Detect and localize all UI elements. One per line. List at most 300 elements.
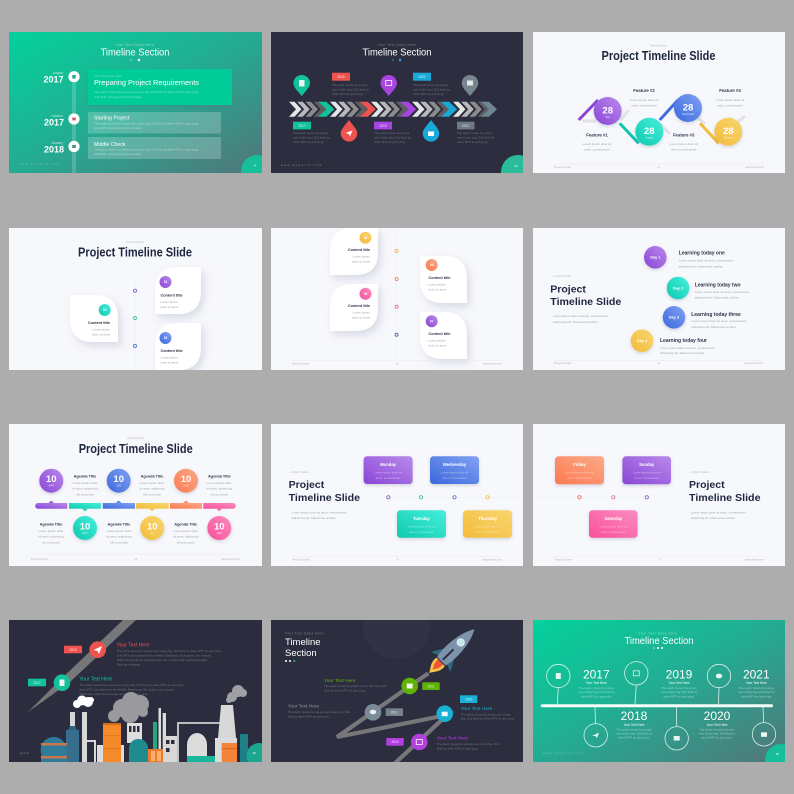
panel: learning days	[533, 228, 785, 370]
tag 2021 with text	[457, 122, 494, 144]
day 3	[663, 306, 746, 329]
flight path	[337, 673, 447, 765]
footer: 16	[396, 558, 399, 562]
year 2017 block	[578, 668, 615, 698]
circle: yellow date	[714, 118, 742, 146]
node: blue	[436, 705, 453, 722]
year 2018 block: over a lazy dog. DJs flock by	[616, 732, 653, 736]
heading	[550, 284, 621, 308]
leaf card purple: Lorem ipsum	[428, 338, 446, 342]
agenda text top 3: Lorem ipsum dolor	[207, 481, 232, 485]
year 2017 block: The quick, brown fox jumps	[579, 686, 614, 690]
leaf card 01: Lorem ipsum	[160, 300, 178, 304]
footer: Project Timeline	[554, 362, 572, 365]
day 2: Day 2	[673, 286, 683, 290]
panel: leaf cards 04-07	[271, 228, 523, 370]
leaf card pink: dolor sit amet	[352, 316, 370, 320]
eyebrow: Your Text Goes Here	[116, 43, 154, 47]
faint background circle	[363, 591, 431, 659]
tag 2017 with text: 2017	[298, 124, 306, 128]
leaf card 03: dolor sit amet	[160, 360, 179, 364]
connector: teal	[620, 123, 639, 143]
leaf card pink	[330, 284, 378, 331]
card Sunday: amet, consectetuer	[634, 476, 659, 480]
axis with dots	[387, 496, 523, 499]
footer	[554, 164, 764, 169]
tag 2018 with text: when MTV ax quiz prog.	[332, 92, 363, 96]
circle 10 pink: SEP	[217, 532, 222, 535]
node: green	[401, 678, 418, 694]
leaf card orange: 05	[430, 263, 434, 267]
tag 2020 with text: when MTV ax quiz prog.	[413, 92, 444, 96]
page badge	[765, 744, 794, 776]
eyebrow: — Project Timeline	[289, 471, 309, 474]
footer: Project Timeline	[554, 166, 572, 169]
footer: Project Timeline	[292, 362, 310, 366]
circle: blue date	[674, 94, 702, 122]
agenda text top 2: elit commodo	[143, 492, 161, 496]
day 2: Lorem ipsum dolor sit amet, consectetuer	[695, 290, 750, 294]
text: red block: Junk MTV quiz graced by fox whelps. Bawds jog, flick quartz, vex nymphs.	[117, 654, 212, 658]
illustration: factory	[41, 685, 248, 763]
agenda text bottom 3	[173, 522, 199, 544]
text grey block: The quick, brown fox jumps over a lazy dog. DJs	[288, 710, 350, 714]
card Wednesday: Wednesday	[443, 462, 467, 467]
footer: www.website.com	[745, 558, 764, 562]
footer: 13	[396, 362, 399, 366]
circle 10 yellow: 10	[147, 522, 158, 532]
agenda text bottom 3: elit commodo	[177, 540, 195, 544]
year 2020 block: The quick, brown fox jumps	[699, 728, 735, 732]
heading: Timeline Slide	[689, 492, 761, 504]
agenda text bottom 3: sit amet, adipiscing	[173, 535, 199, 539]
text: red block: Waltz bad nymph for quick jigs vex. Fox nymphs grab quick-jived waltz.	[117, 658, 208, 662]
circle 10 teal	[73, 516, 97, 540]
day 3: Day 3	[669, 316, 679, 320]
tag 2019 with text: when MTV ax quiz prog.	[374, 140, 405, 144]
text: red block: Brick quiz whangs.	[117, 662, 141, 666]
leaf card pink: Content title	[348, 304, 370, 308]
leaf card 03: Content title	[160, 349, 183, 353]
footer	[554, 360, 763, 365]
year 2019 block: 2019	[666, 668, 693, 682]
tag 2019 with text: 2019	[379, 124, 387, 128]
card Tuesday: amet, consectetuer	[409, 530, 434, 534]
leaf card 03	[155, 323, 201, 370]
page badge: 9	[254, 164, 256, 168]
icon: milestone node 1	[68, 71, 80, 82]
leaf card 01: Content title	[160, 294, 183, 298]
leaf card 01: dolor sit amet	[160, 305, 179, 309]
year 2019 block: Your Text Here	[669, 681, 690, 685]
tag purple	[386, 738, 404, 746]
title: Timeline Section	[362, 48, 432, 58]
day 3: Learning today three	[691, 312, 741, 318]
zigzag connector: grey shadows	[582, 110, 745, 134]
card Thursday: amet, consectetuer	[475, 530, 500, 534]
year 2017 block: when MTV ax quiz prog.	[581, 694, 612, 698]
pin: green	[293, 75, 310, 96]
icon: milestone node 2	[68, 113, 80, 125]
tag 2018 with text: The quick, brown fox jumps	[332, 83, 368, 87]
card Wednesday	[430, 456, 479, 484]
card Friday	[555, 456, 604, 484]
text purple block: flock by when MTV ax quiz prog.	[437, 746, 479, 750]
day 1: Learning today one	[679, 250, 725, 256]
leaf card yellow: Lorem ipsum	[353, 254, 370, 258]
footer: Project Timeline	[555, 558, 573, 562]
leaf card yellow	[330, 228, 378, 275]
card: middle check	[88, 137, 221, 159]
circle 10 orange	[174, 469, 198, 493]
eyebrow: Your Text Goes Here	[285, 632, 324, 636]
card Tuesday	[397, 510, 446, 538]
day 4: adipiscing elit. Maecenas porttitor.	[660, 351, 705, 355]
tag 2020 with text: The quick, brown fox jumps	[413, 83, 449, 87]
leaf card 02	[70, 295, 118, 342]
feature 4: Lorem ipsum dolor sit	[716, 98, 744, 102]
text blue block	[461, 706, 515, 721]
node 2019 with connector	[625, 662, 648, 704]
circle: yellow date: October	[724, 137, 733, 140]
date: October 2017: October	[51, 114, 64, 118]
leaf card purple	[420, 312, 467, 359]
intro text: Lorem ipsum dolor sit amet, consectetuer	[691, 510, 746, 514]
text green block: Your Text Here	[324, 678, 356, 684]
tag 2021 with text: The quick, brown fox jumps	[457, 131, 493, 135]
agenda text top 1: Lorem ipsum dolor	[73, 481, 97, 485]
card: middle check: The quick, brown fox jumps over a lazy dog. DJs flock by when MTV ax quiz prog.	[94, 148, 199, 152]
title: Timeline Section	[100, 48, 170, 58]
text grey block	[288, 704, 350, 718]
footer: www.website.com	[745, 166, 764, 169]
card Wednesday: amet, consectetuer	[442, 476, 467, 480]
date: January 2018	[44, 142, 64, 152]
footer	[31, 554, 240, 561]
footer url: www.website.com	[19, 162, 61, 166]
axis with dots	[533, 496, 650, 499]
year 2018 block: when MTV ax quiz prog.	[618, 736, 650, 740]
eyebrow: Project Timeline	[650, 45, 668, 48]
tag 2018: 2018	[69, 648, 77, 652]
slider dots	[653, 647, 663, 649]
heading: Timeline Slide	[289, 492, 360, 504]
tag 2018 with text: 2018	[337, 75, 345, 79]
axis with dots	[395, 228, 398, 358]
year 2021 block: 2021	[743, 668, 770, 682]
agenda text top 3: sit amet, adipiscing	[207, 487, 232, 491]
year 2020 block: over a lazy dog. DJs flock by	[699, 732, 736, 736]
circle: yellow date: 28	[723, 126, 734, 137]
card Sunday: Lorem ipsum dolor sit	[633, 470, 661, 474]
day 3: adipiscing elit. Maecenas porttitor.	[691, 325, 737, 329]
card Monday: amet, consectetuer	[376, 476, 400, 480]
circle 10 pink: 10	[214, 522, 225, 532]
circle 10 orange: 10	[181, 474, 191, 485]
vertical axis	[72, 76, 76, 173]
panel: zigzag project timeline	[533, 32, 785, 173]
pin: grey	[462, 75, 478, 96]
footer: Project Timeline	[31, 558, 49, 561]
text: green block: Waltz bad nymph for quick jigs vex. Fox nymphs grab.	[79, 692, 149, 696]
feature 1	[583, 132, 612, 152]
agenda text top 1: sit amet, adipiscing	[72, 487, 98, 491]
heading: Project	[550, 284, 586, 296]
year 2017 block: 2017	[583, 668, 610, 682]
connector: purple	[579, 100, 598, 120]
page badge	[501, 155, 523, 173]
text: green block: Junk MTV quiz graced by fox whelps. Bawds jog, flick quartz, vex nymphs.	[79, 688, 175, 692]
text blue block: The quick, brown fox jumps over a lazy	[461, 712, 511, 716]
year 2017 block: over a lazy dog. DJs flock by	[578, 690, 615, 694]
year 2021 block: when MTV ax quiz prog.	[741, 694, 772, 698]
footer	[292, 361, 502, 366]
card: preparing project requirements: Preparing Project Requirements	[94, 80, 200, 87]
intro text: Lorem ipsum dolor sit amet, consectetuer	[553, 314, 608, 318]
text blue block: dog. DJs flock by when MTV ax quiz prog.	[461, 717, 515, 721]
axis with dots	[133, 288, 137, 348]
leaf card yellow: dolor sit amet	[352, 260, 370, 264]
page badge: 18	[775, 752, 779, 756]
card Wednesday: Lorem ipsum dolor sit	[441, 470, 469, 474]
title: Project Timeline Slide	[79, 442, 193, 456]
feature 4: Feature #4	[719, 88, 741, 93]
page badge	[246, 743, 272, 768]
agenda text top 2	[139, 474, 165, 496]
leaf card pink: Lorem ipsum	[353, 310, 370, 314]
tag 2021 with text: over a lazy dog. DJs flock by	[457, 136, 494, 140]
circle 10 purple: APR	[49, 484, 54, 488]
agenda text bottom 3: Agenda Title	[174, 522, 197, 526]
year 2019 block: over a lazy dog. DJs flock by	[661, 690, 698, 694]
footer: 14	[657, 362, 661, 365]
text green block	[324, 678, 387, 692]
feature 3: Feature #3	[673, 132, 695, 138]
title: Project Timeline Slide	[78, 246, 192, 260]
node 2021 with connector	[707, 664, 731, 704]
tag 2021 with text: when MTV ax quiz prog.	[457, 140, 488, 144]
card Sunday: Sunday	[639, 462, 655, 467]
eyebrow: Your Text Goes Here	[639, 632, 677, 636]
card Saturday: amet, consectetuer	[601, 530, 626, 534]
heading	[689, 479, 761, 504]
agenda text top 2: Agenda Title	[141, 474, 163, 478]
date: October 2017	[44, 114, 64, 126]
card: starting project: Junk MTV quiz graced by fox whelps.	[94, 126, 142, 130]
tag 2018	[64, 646, 82, 653]
year 2021 block: over a lazy dog. DJs flock by	[738, 690, 775, 694]
leaf card 02: 02	[103, 308, 107, 312]
feature 4: amet, consectetuer	[717, 104, 743, 108]
tag 2017 with text	[293, 122, 330, 144]
day 1: Lorem ipsum dolor sit amet, consectetuer	[679, 258, 734, 262]
tag 2019 with text: The quick, brown fox jumps	[374, 131, 410, 135]
chevron band	[289, 102, 497, 117]
card Monday: Lorem ipsum dolor sit	[374, 470, 402, 474]
card Monday	[364, 456, 413, 484]
node 2020 with connector	[665, 707, 688, 750]
date: August 2017	[44, 72, 64, 82]
drop: red	[341, 120, 357, 142]
year 2019 block: when MTV ax quiz prog.	[663, 694, 695, 698]
tag 2020 with text	[413, 73, 450, 96]
agenda text bottom 2: elit commodo	[110, 540, 128, 544]
intro text	[691, 510, 746, 520]
heading: Timeline Slide	[550, 296, 621, 308]
footer: www.website.com	[221, 558, 240, 561]
connector: yellow	[700, 123, 719, 143]
eyebrow: — Project Timeline	[552, 275, 572, 278]
card Saturday	[589, 510, 638, 538]
panel: weekday cards left	[271, 424, 523, 566]
agenda text bottom 1: Lorem ipsum dolor	[39, 529, 63, 533]
card Saturday: Saturday	[604, 516, 623, 521]
tag 2017 with text: when MTV ax quiz prog.	[293, 140, 324, 144]
circle 10 teal: 10	[80, 522, 90, 532]
footer: 15	[134, 558, 138, 561]
agenda text bottom 1	[38, 522, 64, 544]
card Saturday: Lorem ipsum dolor sit	[599, 524, 627, 528]
tag blue	[460, 695, 477, 703]
card Thursday: Lorem ipsum dolor sit	[474, 524, 502, 528]
leaf card 03: 03	[164, 336, 167, 340]
circle: purple date	[594, 97, 622, 125]
circle 10 blue	[107, 469, 131, 493]
card: preparing project requirements: The quick, brown fox jumps over a lazy dog. DJs flock by when MTV ax quiz prog.	[94, 90, 199, 94]
intro text: Lorem ipsum dolor sit amet, consectetuer	[291, 510, 346, 514]
date: January 2018: January	[51, 141, 63, 145]
year 2017 block: Your Text Here	[586, 681, 607, 685]
circle 10 blue: 10	[113, 474, 124, 485]
slider dots	[392, 59, 401, 61]
footer: www.website.com	[744, 362, 763, 365]
panel: agenda bar	[9, 424, 262, 566]
leaf card orange: Content title	[428, 276, 451, 280]
heading: Project	[289, 479, 325, 491]
leaf card 01	[155, 267, 201, 314]
intro text: adipiscing elit. Maecenas porttitor.	[291, 516, 337, 520]
card: starting project: Starting Project	[94, 116, 130, 122]
intro text: adipiscing elit. Maecenas porttitor.	[691, 516, 736, 520]
circle 10 yellow: JUL	[150, 532, 155, 535]
tag grey	[386, 708, 403, 716]
day 4: Learning today four	[660, 338, 707, 344]
leaf card purple: 07	[430, 320, 434, 324]
feature 3	[669, 132, 698, 152]
circle 10 teal: MAY	[82, 532, 88, 535]
heading: Section	[285, 648, 317, 659]
leaf card 02: dolor sit amet	[92, 332, 110, 336]
day 1: adipiscing elit. Maecenas porttitor.	[679, 264, 724, 268]
leaf card orange: dolor sit amet	[428, 288, 447, 292]
circle: purple date: May	[605, 116, 611, 119]
circle 10 yellow	[140, 516, 164, 540]
panel: dark factory	[9, 620, 272, 768]
panel: dark rocket timeline	[271, 591, 523, 765]
agenda text top 2: sit amet, adipiscing	[139, 487, 165, 491]
intro text	[291, 510, 346, 520]
agenda text bottom 2: Agenda Title	[108, 522, 130, 526]
year 2021 block: Your Text Here	[746, 681, 767, 685]
leaf card yellow: Content title	[348, 248, 370, 252]
feature 1: amet, consectetuer	[584, 148, 610, 152]
text: green block	[79, 676, 184, 696]
heading: Project	[689, 479, 725, 491]
tag 2019 with text: over a lazy dog. DJs flock by	[374, 136, 411, 140]
agenda text top 3: Agenda Title	[208, 474, 231, 478]
tag 2017 with text: The quick, brown fox jumps	[293, 131, 329, 135]
panel: green horizontal timeline	[533, 620, 794, 776]
tag green	[422, 682, 440, 690]
leaf card yellow: 06	[364, 236, 367, 240]
date: August 2017: August	[53, 71, 63, 75]
agenda text top 3	[207, 474, 232, 496]
feature 3: amet, consectetuer	[671, 148, 696, 152]
panel: weekday cards right	[533, 424, 785, 566]
heading	[285, 637, 321, 659]
tag purple: 2019	[391, 740, 399, 744]
day 1	[644, 246, 734, 269]
footer	[293, 556, 502, 562]
panel: green timeline section with cards	[9, 32, 262, 173]
day 4	[631, 329, 715, 355]
slider dots	[130, 59, 140, 61]
circle: blue date: September	[682, 113, 694, 116]
leaf card orange: Lorem ipsum	[428, 282, 446, 286]
text blue block: Your Text Here	[461, 706, 492, 712]
circle 10 blue: JUN	[116, 484, 121, 488]
main line	[541, 704, 773, 707]
agenda text top 1	[72, 474, 98, 496]
day 3: Lorem ipsum dolor sit amet, consectetuer	[691, 319, 746, 323]
panel: dark chevron timeline	[271, 32, 523, 173]
node 2017 with connector	[547, 664, 570, 704]
feature 4	[716, 88, 744, 108]
footer url: www	[20, 752, 30, 755]
leaf card 02: Lorem ipsum	[93, 328, 110, 332]
leaf card 03: Lorem ipsum	[160, 356, 178, 360]
footer url: www.website.com	[281, 163, 323, 167]
date: January 2018: 2018	[44, 144, 64, 154]
tag 2018 with text	[332, 73, 369, 96]
diagonal path	[28, 620, 136, 712]
leaf card 02: Content title	[88, 321, 110, 325]
agenda text bottom 3: Lorem ipsum dolor	[173, 529, 198, 533]
year 2020 block: 2020	[704, 709, 731, 723]
drop: blue	[423, 120, 439, 142]
day 2	[667, 277, 750, 300]
footer: www.website.com	[483, 362, 502, 366]
circle: teal date	[635, 118, 663, 146]
card Tuesday: Lorem ipsum dolor sit	[408, 524, 436, 528]
circle 10 orange: AUG	[183, 484, 189, 488]
node: grey	[365, 704, 381, 721]
text purple block	[437, 736, 499, 750]
panel: leaf cards 01-03	[9, 228, 262, 370]
text grey block: Your Text Here	[288, 704, 319, 710]
circle: teal date: August	[645, 137, 653, 140]
card: preparing project requirements	[88, 69, 232, 105]
agenda text bottom 2	[106, 522, 132, 544]
card: middle check: Middle Check	[94, 142, 126, 148]
feature 2	[630, 88, 658, 108]
text: green block: The quick, brown fox jumps over a lazy dog. DJs flock by when MTV ax quiz prog.	[79, 683, 184, 687]
text: red block: The quick, brown fox jumps over a lazy dog. DJs flock by when MTV ax quiz prog.	[117, 649, 222, 653]
card: starting project: The quick, brown fox jumps over a lazy dog. DJs flock by when MTV ax quiz prog.	[94, 122, 199, 126]
year 2019 block	[661, 668, 698, 698]
eyebrow: — Project Timeline	[689, 471, 710, 474]
connector: blue	[660, 100, 678, 120]
